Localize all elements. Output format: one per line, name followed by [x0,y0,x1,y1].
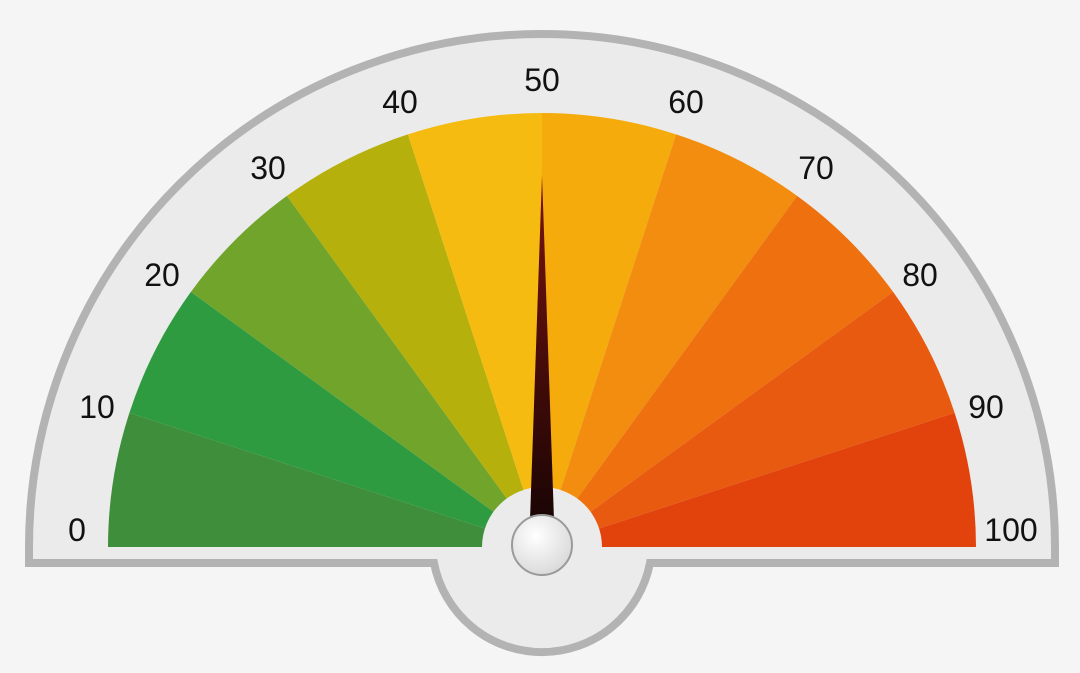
scale labels: 80 [902,257,938,293]
colored segments [108,113,976,547]
scale labels [68,62,1038,548]
scale labels: 100 [984,512,1038,548]
scale labels: 90 [968,389,1004,425]
scale labels: 10 [79,389,115,425]
scale labels: 30 [250,150,286,186]
scale labels: 0 [68,512,86,548]
scale labels: 60 [668,84,704,120]
needle [530,175,554,520]
center notch [482,487,602,547]
scale labels: 20 [144,257,180,293]
scale labels: 40 [382,84,418,120]
scale labels: 70 [798,150,834,186]
scale labels: 50 [524,62,560,98]
center cap [512,515,572,575]
